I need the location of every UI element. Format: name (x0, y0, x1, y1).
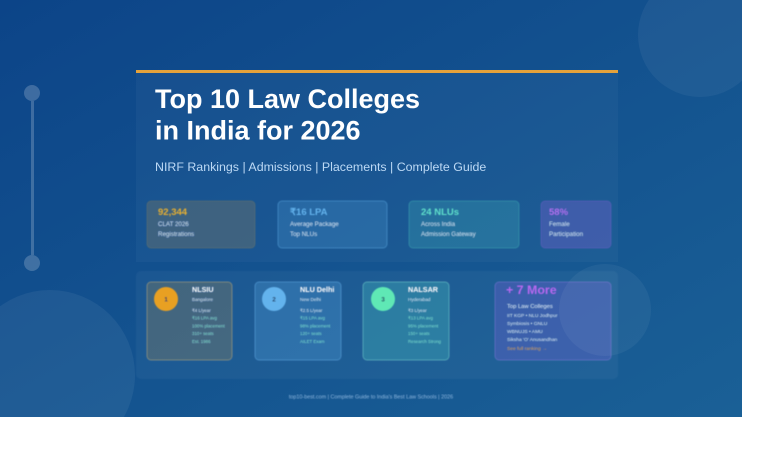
header panel (136, 70, 618, 262)
card: NLU Delhi: 98% placement (300, 324, 331, 328)
stat: registrations: CLAT 2026 (158, 221, 189, 228)
card: NLU Delhi: NLU Delhi (300, 285, 334, 294)
card: NLSIU: 100% placement (192, 324, 225, 328)
card: NLU Delhi: ₹15 LPA avg (300, 316, 325, 320)
stat: NLUs: Admission Gateway (421, 231, 477, 238)
card: NALSAR: 3 (381, 296, 385, 304)
stat: female participation: 58% (549, 207, 569, 218)
stat: package (278, 201, 387, 248)
title: Top 10 Law Colleges (155, 84, 420, 114)
accent bar (136, 70, 618, 73)
card: NLU Delhi: ₹2.5 L/year (300, 308, 323, 313)
card: NLU Delhi (255, 282, 341, 360)
card: NALSAR: 95% placement (408, 324, 439, 328)
footer: top10-best.com | Complete Guide to India's Best Law Schools | 2026 (289, 394, 453, 400)
card: NALSAR: 150+ seats (408, 331, 430, 336)
stat: package: ₹16 LPA (290, 207, 328, 218)
card: 7 more: Top Law Colleges (507, 304, 553, 310)
stat: female participation: Female (549, 221, 570, 228)
card: NALSAR: ₹3 L/year (408, 308, 427, 313)
card: NLU Delhi: AILET Exam (300, 339, 325, 344)
card: NALSAR (363, 282, 449, 360)
card: 7 more (495, 282, 611, 360)
stat: female participation (541, 201, 611, 248)
card: NLSIU: NLSIU (192, 285, 214, 294)
card: NLSIU: 310+ seats (192, 331, 214, 336)
card: 7 more: + 7 More (506, 283, 557, 297)
card: 7 more: Symbiosis • GNLU (507, 321, 548, 327)
card: NLSIU: 1 (164, 296, 168, 304)
stat: female participation: Participation (549, 231, 584, 238)
card: NALSAR: ₹13 LPA avg (408, 316, 433, 320)
card: NALSAR: Hyderabad (408, 297, 431, 302)
stat: registrations: 92,344 (158, 207, 188, 218)
card: 7 more: IIT KGP • NLU Jodhpur (507, 313, 558, 319)
card: NLSIU: Bangalore (192, 297, 213, 302)
card: NLU Delhi: 2 (272, 296, 276, 304)
stat: package: Average Package (290, 221, 339, 228)
stat: package: Top NLUs (290, 231, 317, 238)
stat: registrations: Registrations (158, 231, 194, 238)
stat: NLUs: Across India (421, 221, 456, 228)
card: NLSIU: ₹4 L/year (192, 308, 211, 313)
subtitle: NIRF Rankings | Admissions | Placements | Complete Guide (155, 160, 486, 174)
card: NLSIU: Est. 1986 (192, 339, 211, 344)
card: 7 more: See full ranking → (507, 346, 547, 352)
title: in India for 2026 (155, 116, 361, 146)
card: NLU Delhi: New Delhi (300, 297, 321, 302)
card: NALSAR: Research Strong (408, 339, 442, 344)
card: 7 more: Siksha 'O' Anusandhan (507, 337, 558, 343)
stat: NLUs: 24 NLUs (421, 207, 459, 218)
colleges panel (136, 271, 618, 379)
card: NLSIU: ₹16 LPA avg (192, 316, 217, 320)
mid-right decorative circle (559, 264, 651, 356)
stat: registrations (147, 201, 255, 248)
card: NALSAR: NALSAR (408, 285, 439, 294)
card: NLSIU (147, 282, 232, 360)
card: NLU Delhi: 120+ seats (300, 331, 322, 336)
stat cards (147, 201, 611, 248)
stat: NLUs (409, 201, 519, 248)
decorative line with dots (24, 85, 40, 271)
card: 7 more: WBNUJS • AMU (507, 329, 543, 335)
